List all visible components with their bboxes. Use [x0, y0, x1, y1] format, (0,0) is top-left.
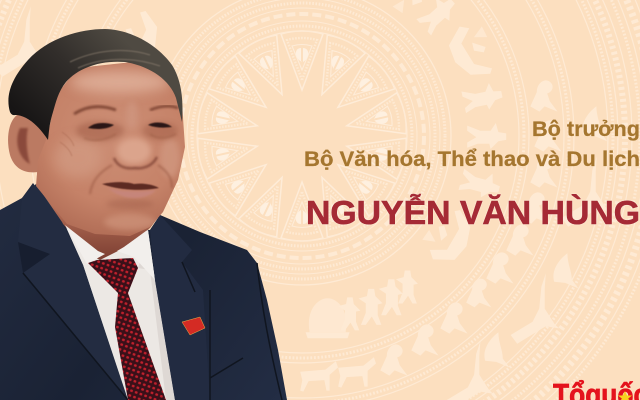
shirt collar [65, 225, 155, 280]
shirt [65, 225, 175, 400]
mouth [102, 182, 159, 198]
minister title text [304, 118, 640, 171]
face [36, 62, 185, 236]
ear shadow [17, 128, 30, 164]
hair [8, 29, 183, 140]
neck [36, 184, 160, 260]
necktie [88, 258, 166, 400]
ear [8, 114, 52, 172]
face shading [54, 71, 180, 230]
suit jacket [0, 183, 287, 400]
ministry line: Bộ Văn hóa, Thể thao và Du lịch [304, 148, 640, 171]
role line: Bộ trưởng [532, 118, 640, 141]
left lapel notch [18, 242, 50, 273]
animal band: birds and deer [50, 44, 562, 392]
eyes and brows [74, 106, 178, 140]
portrait photo [0, 29, 287, 400]
jacket seams [23, 262, 282, 400]
party pin [182, 317, 205, 335]
right lapel [150, 215, 210, 400]
figure band: boats and people [105, 0, 506, 338]
nose [114, 138, 157, 168]
star triangles ring [195, 31, 409, 241]
left lapel [18, 184, 128, 400]
shirt shadow [138, 235, 175, 400]
name heading: NGUYỄN VĂN HÙNG [306, 194, 640, 231]
